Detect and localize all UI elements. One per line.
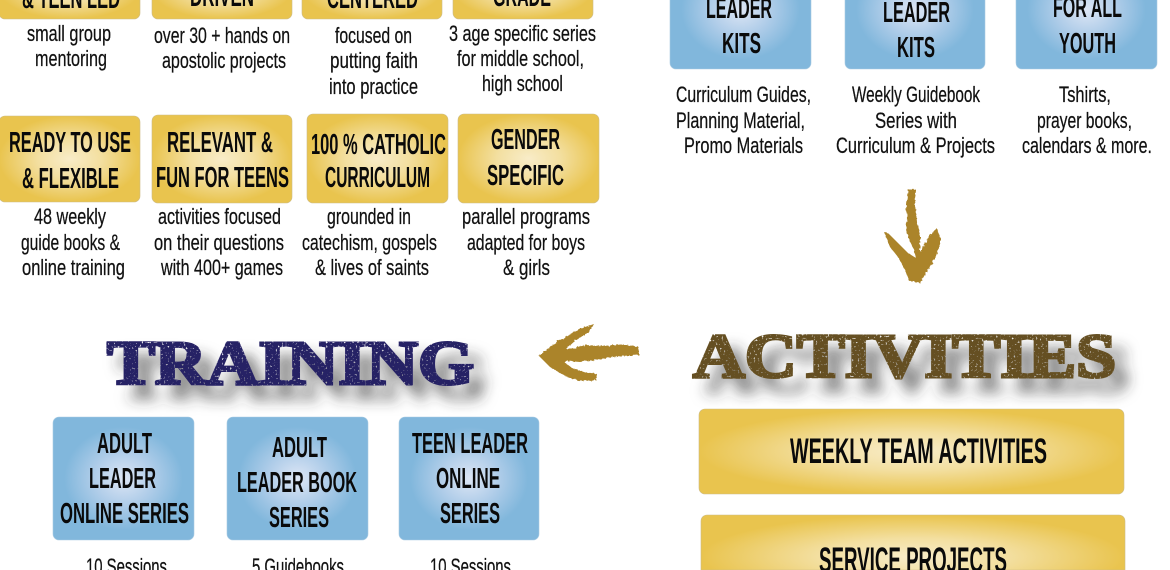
- card: relevant and fun: FUN FOR TEENS: [156, 162, 289, 194]
- card: relevant and fun: with 400+ games: [160, 255, 283, 280]
- arrow: down to activities: [884, 189, 941, 283]
- card: teen leader online series: TEEN LEADER: [412, 428, 528, 460]
- card: for all youth: [1016, 0, 1157, 158]
- card: adult leader book series: SERIES: [269, 502, 329, 534]
- card: for all youth: YOUTH: [1059, 28, 1116, 60]
- card: adult leader kits: KITS: [722, 28, 761, 60]
- heading: training: TRAINING: [107, 330, 474, 398]
- card: adult leader book series: LEADER BOOK: [237, 467, 357, 499]
- card: teen led: [0, 0, 140, 71]
- card: ready to use: online training: [22, 255, 125, 280]
- arrow: left to training: [539, 324, 639, 381]
- card: grade: for middle school,: [457, 46, 584, 71]
- card: relevant and fun: on their questions: [154, 230, 284, 255]
- card: teen leader kits: [836, 0, 995, 158]
- card: adult leader online series: [53, 417, 194, 570]
- card: driven: over 30 + hands on: [154, 23, 290, 48]
- card: driven: apostolic projects: [162, 48, 286, 73]
- card: relevant and fun: [152, 115, 292, 280]
- card: adult leader online series: ONLINE SERIES: [60, 498, 189, 530]
- bar: service projects: [701, 515, 1125, 570]
- bar: weekly team activities: [699, 409, 1124, 494]
- card: adult leader kits: Curriculum Guides,: [676, 82, 811, 107]
- card: teen leader online series: ONLINE: [436, 463, 500, 495]
- card: teen led: mentoring: [35, 46, 107, 71]
- card: gender specific: GENDER: [491, 124, 560, 156]
- card: teen leader kits: Curriculum & Projects: [836, 133, 995, 158]
- card: for all youth: Tshirts,: [1059, 82, 1111, 107]
- panel: top gold features row: [0, 0, 596, 99]
- card: catholic curriculum: [302, 114, 448, 280]
- card: teen led: small group: [27, 21, 111, 46]
- card: centered: putting faith: [330, 48, 418, 73]
- card: teen leader online series: SERIES: [440, 498, 500, 530]
- card: teen leader kits: Weekly Guidebook: [852, 82, 981, 107]
- card: catholic curriculum: grounded in: [327, 204, 411, 229]
- card: for all youth: prayer books,: [1037, 108, 1132, 133]
- card: gender specific: parallel programs: [462, 204, 590, 229]
- card: centered: [302, 0, 442, 99]
- card: driven: [152, 0, 292, 73]
- panel: training cards: [53, 417, 539, 570]
- card: teen leader online series: [399, 417, 539, 570]
- card: catholic curriculum: CURRICULUM: [325, 162, 430, 194]
- card: catholic curriculum: catechism, gospels: [302, 230, 437, 255]
- card: ready to use: [0, 116, 140, 280]
- card: grade: [449, 0, 596, 96]
- heading: activities: ACTIVITIES: [693, 323, 1116, 391]
- card: ready to use: 48 weekly: [34, 204, 106, 229]
- card: teen leader kits: KITS: [897, 32, 935, 64]
- panel: activity bars: [699, 409, 1125, 570]
- card: adult leader book series: ADULT: [272, 432, 327, 464]
- card: relevant and fun: RELEVANT &: [167, 127, 273, 159]
- card: adult leader online series: LEADER: [89, 463, 156, 495]
- card: adult leader kits: Planning Material,: [676, 108, 805, 133]
- card: adult leader kits: [670, 0, 811, 158]
- card: gender specific: & girls: [503, 255, 550, 280]
- card: centered: into practice: [329, 74, 418, 99]
- card: ready to use: & FLEXIBLE: [22, 163, 119, 195]
- card: grade: 3 age specific series: [449, 21, 596, 46]
- card: relevant and fun: activities focused: [158, 204, 281, 229]
- card: adult leader kits: Promo Materials: [684, 133, 803, 158]
- panel: second gold features row: [0, 114, 599, 280]
- card: grade: high school: [482, 71, 563, 96]
- card: adult leader book series: [227, 417, 368, 570]
- card: ready to use: READY TO USE: [9, 127, 131, 159]
- card: centered: focused on: [335, 23, 412, 48]
- panel: top blue resource cards: [670, 0, 1157, 158]
- card: adult leader online series: ADULT: [97, 428, 152, 460]
- card: gender specific: SPECIFIC: [487, 160, 564, 192]
- card: gender specific: adapted for boys: [467, 230, 585, 255]
- card: gender specific: [458, 114, 599, 280]
- card: ready to use: guide books &: [21, 230, 120, 255]
- card: catholic curriculum: & lives of saints: [315, 255, 429, 280]
- card: teen leader kits: Series with: [875, 108, 957, 133]
- card: catholic curriculum: 100 % CATHOLIC: [311, 129, 446, 161]
